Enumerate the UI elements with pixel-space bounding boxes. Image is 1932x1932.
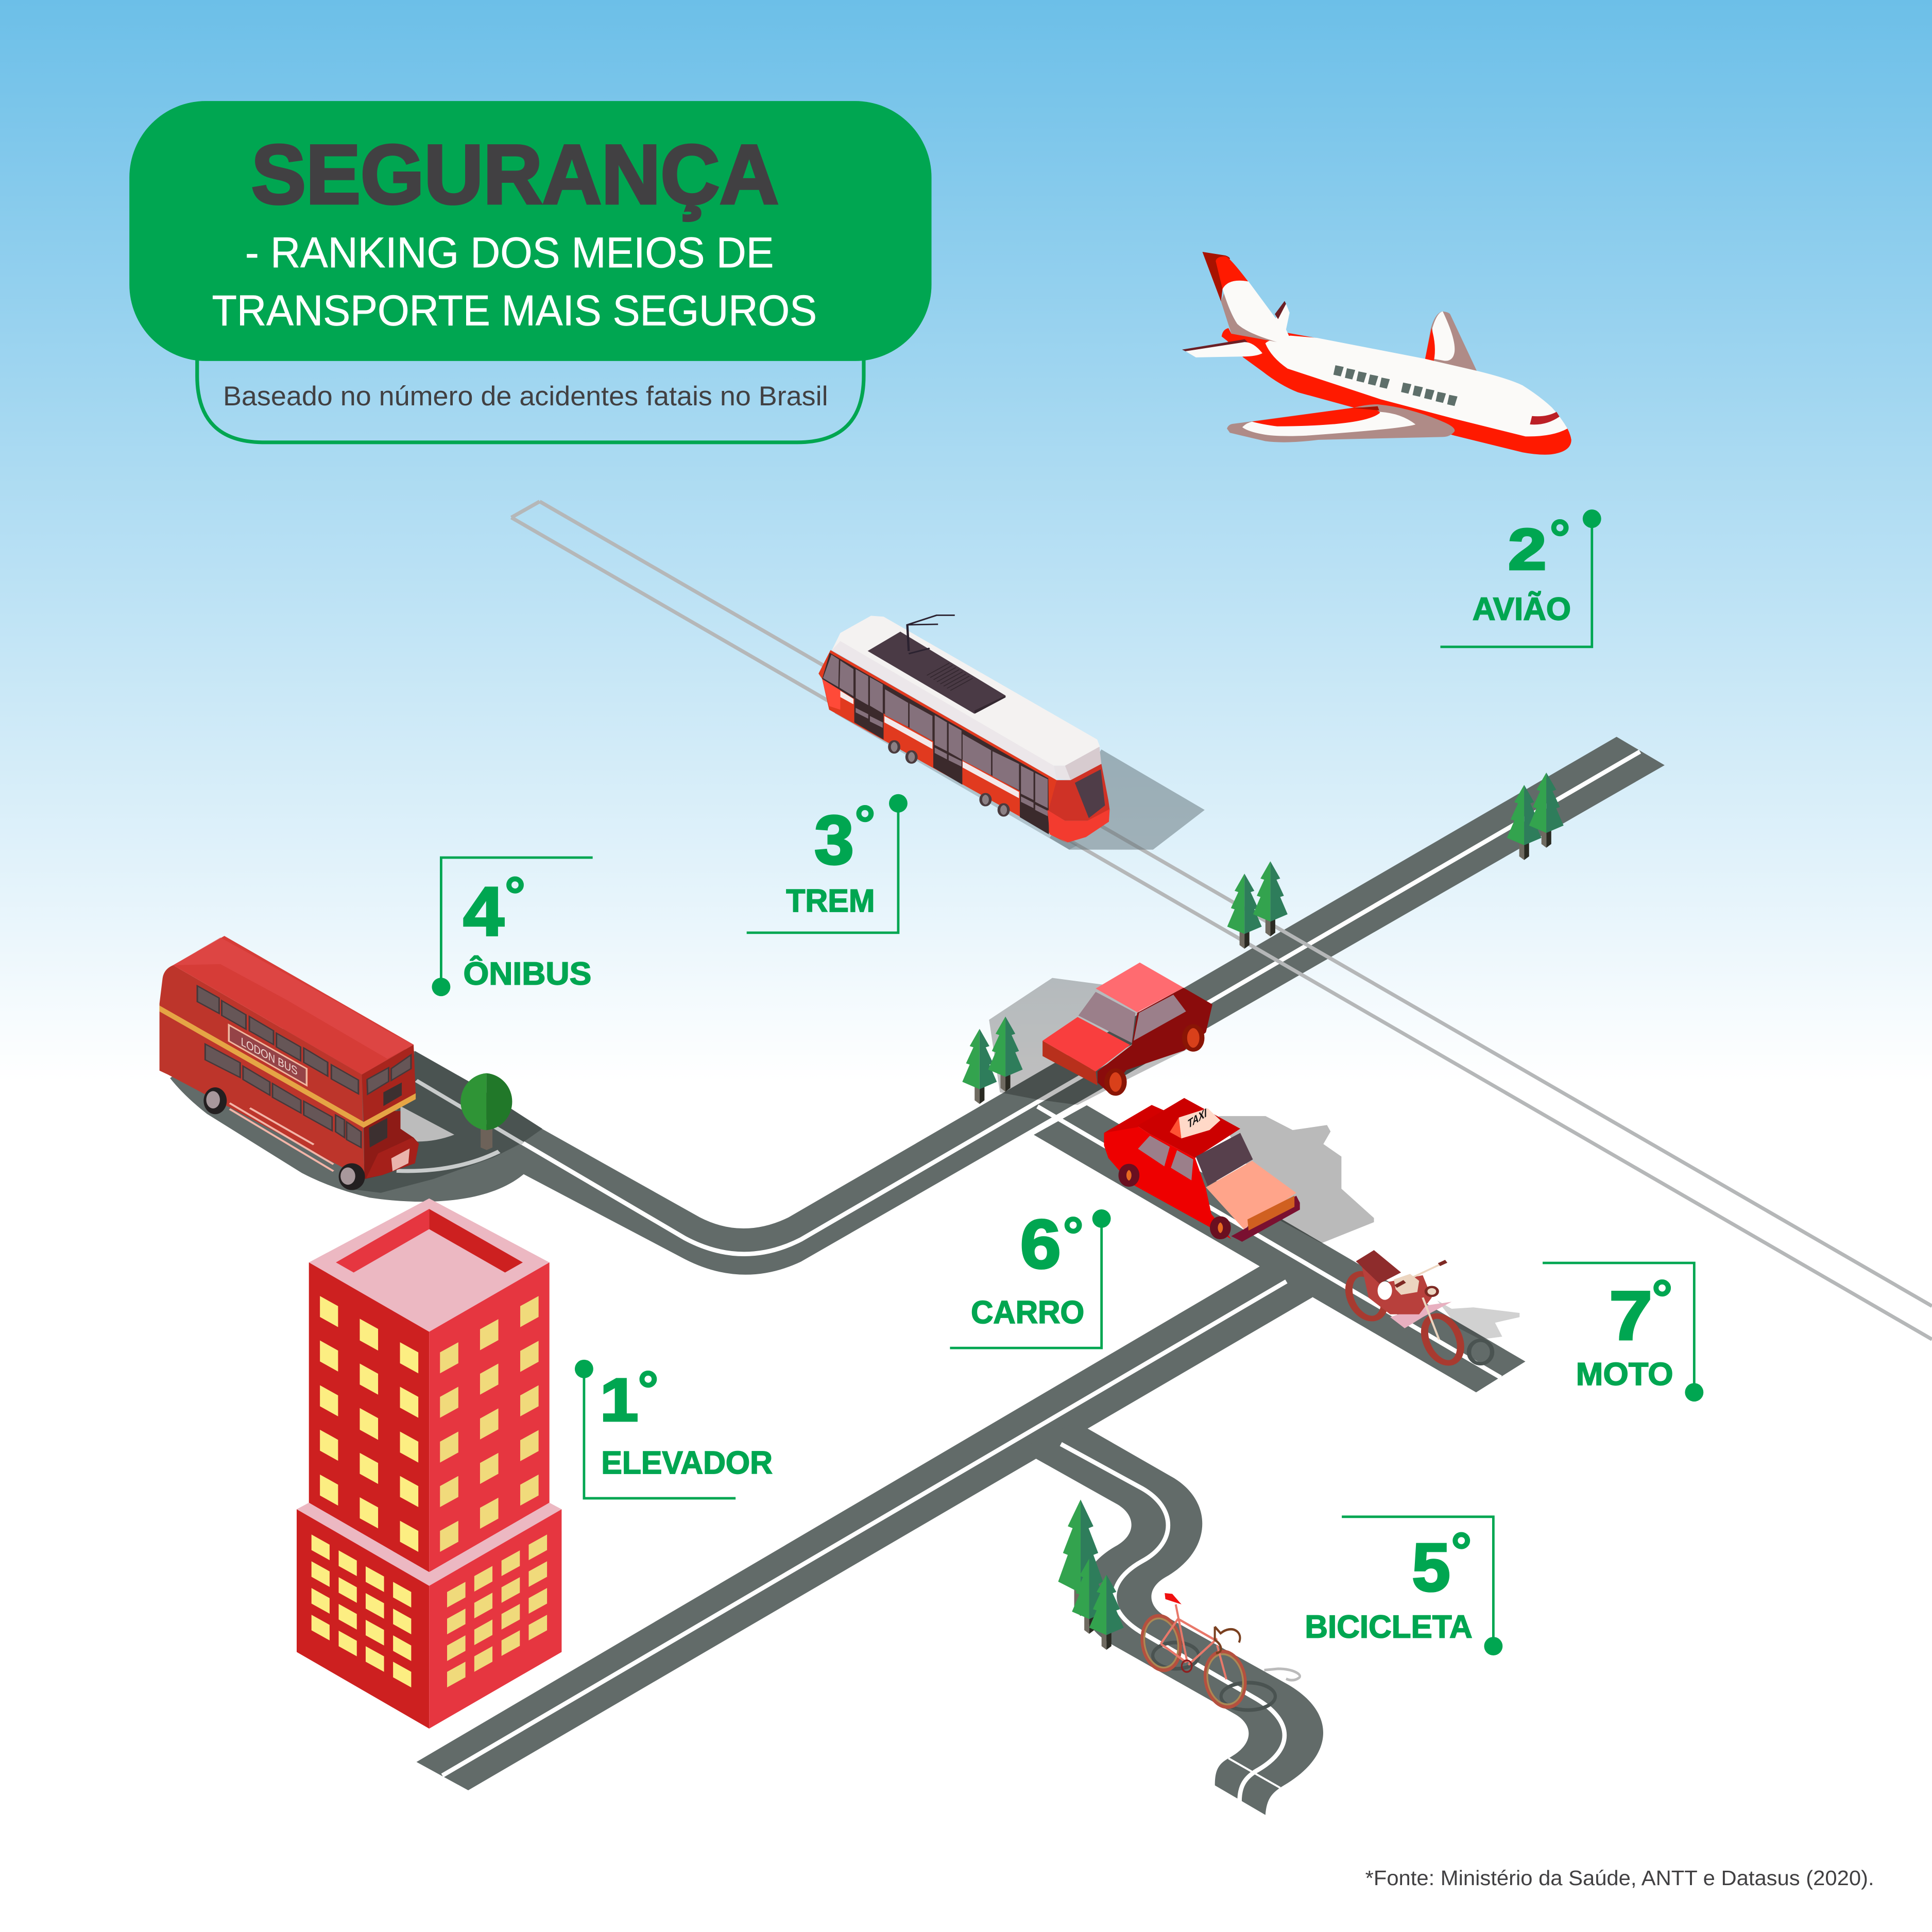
bus wheels (203, 1087, 365, 1190)
taxi roof (1137, 1098, 1240, 1158)
bus roof (173, 936, 414, 1074)
train roof panel (868, 631, 1005, 714)
label 5: bicicleta (1305, 1517, 1502, 1655)
taxi grille (1231, 1195, 1300, 1242)
motorcycle wheels (1343, 1271, 1467, 1366)
bus inner gap (401, 1106, 454, 1141)
lower left windows (312, 1534, 411, 1687)
label 3: trem: ° (854, 795, 875, 853)
label 5: bicicleta: ° (1451, 1522, 1472, 1580)
bus gold stripe (160, 1005, 416, 1128)
bus side (160, 965, 365, 1179)
main road with curve to the bus (170, 737, 1665, 1275)
train windows (822, 653, 1049, 834)
bus front small windows (369, 1083, 402, 1148)
bicycle shadow (1153, 1643, 1199, 1669)
title line one: - RANKING DOS MEIOS DE (245, 228, 774, 277)
taxi side (1104, 1126, 1231, 1239)
label 7: moto: MOTO (1576, 1357, 1673, 1392)
train pantograph (908, 615, 955, 654)
motorcycle frame (1390, 1302, 1451, 1328)
train rear and side (818, 650, 1068, 843)
bus hood and grille (366, 1138, 419, 1178)
near wing (1227, 404, 1455, 442)
car windows (1079, 992, 1186, 1043)
far wing (1425, 311, 1477, 371)
label 1: elevador: ° (638, 1361, 658, 1418)
bus destination sign: LODON BUS (241, 1035, 297, 1079)
trees beside the red car (962, 1017, 1023, 1104)
label 3: trem (747, 794, 908, 933)
title heading: SEGURANÇA (251, 128, 779, 221)
airplane red underside (1222, 328, 1571, 455)
motorcycle (1343, 1250, 1519, 1366)
taxi (1104, 1098, 1374, 1243)
label 4: ônibus: ÔNIBUS (463, 955, 591, 991)
bicycle handlebar (1215, 1627, 1240, 1653)
upper tower faces (309, 1262, 429, 1572)
lower right windows (447, 1534, 547, 1687)
car roof (1096, 963, 1184, 1012)
round tree (460, 1073, 512, 1150)
label 4: ônibus: ° (505, 867, 525, 925)
label 1: elevador (575, 1360, 773, 1498)
airplane white fuselage (1266, 336, 1567, 436)
taxi wheels (1122, 1167, 1227, 1236)
bicycle (1138, 1593, 1300, 1712)
label 7: moto: ° (1652, 1270, 1672, 1327)
double-decker bus (160, 936, 542, 1193)
subtitle: Baseado no número de acidentes fatais no Brasil (223, 381, 828, 412)
taxi sign (1170, 1105, 1220, 1138)
bus windows (197, 986, 411, 1148)
long diagonal road (417, 1244, 1331, 1790)
label 1: elevador: ELEVADOR (601, 1445, 773, 1481)
subtitle outline box (197, 345, 864, 442)
building ledge (297, 1503, 561, 1586)
passenger windows (1333, 365, 1458, 406)
label 4: ônibus: 4 (463, 874, 504, 950)
train roof (832, 616, 1100, 766)
upper left windows (320, 1296, 418, 1552)
lower block faces (297, 1509, 429, 1729)
bus destination sign (229, 1025, 306, 1085)
railway track (511, 502, 1932, 1339)
building roof (309, 1199, 550, 1332)
airplane (1182, 252, 1571, 455)
bus road shadow (349, 1051, 542, 1193)
car hood (1042, 1017, 1130, 1071)
rear stabilizer (1182, 339, 1262, 357)
taxi shadow (1219, 1116, 1374, 1243)
bus lower stripes (230, 1103, 333, 1171)
title line two: TRANSPORTE MAIS SEGUROS (212, 286, 817, 335)
upper right windows (440, 1296, 539, 1552)
road towards motorcycle (1034, 1105, 1526, 1392)
label 6: carro: 6 (1020, 1206, 1061, 1283)
road centre stripes (417, 751, 1640, 1801)
car side (1098, 988, 1212, 1092)
winding bicycle road (1023, 1411, 1323, 1815)
tail fin (1202, 252, 1291, 342)
train shadow (1050, 749, 1205, 850)
building: elevador (297, 1199, 561, 1729)
label 6: carro (950, 1206, 1111, 1348)
train front (1048, 764, 1110, 821)
taxi windows (1138, 1136, 1193, 1181)
bus turn stripe (397, 1152, 499, 1171)
train wheels (890, 741, 1008, 816)
taxi hood (1206, 1161, 1296, 1229)
bicycle trees (1058, 1499, 1124, 1650)
cockpit window (1530, 412, 1560, 424)
label 2: avião: 2 (1508, 517, 1546, 582)
road network (170, 737, 1665, 1815)
trees along main road (1227, 773, 1564, 949)
label 2: avião (1441, 509, 1601, 647)
red car (989, 963, 1212, 1105)
car wheels (1107, 1026, 1202, 1094)
label 7: moto: 7 (1609, 1277, 1652, 1354)
bicycle frame (1161, 1604, 1226, 1679)
label 5: bicicleta: BICICLETA (1305, 1609, 1473, 1645)
label 4: ônibus (432, 858, 593, 996)
label 5: bicicleta: 5 (1412, 1529, 1450, 1605)
label 6: carro: CARRO (971, 1295, 1084, 1330)
label 3: trem: 3 (814, 802, 854, 879)
label 3: trem: TREM (786, 883, 875, 919)
bus front (362, 1045, 416, 1127)
source footnote: *Fonte: Ministério da Saúde, ANTT e Datasus (2020). (1365, 1866, 1874, 1890)
shaded road stripe (416, 1081, 523, 1143)
label 2: avião: ° (1549, 509, 1570, 567)
car shadow (989, 978, 1188, 1105)
bicycle wheels (1138, 1612, 1250, 1712)
taxi sign: TAXI (1188, 1105, 1207, 1132)
car front (1042, 1041, 1098, 1085)
title panel (129, 101, 932, 361)
train white stripes (884, 716, 1019, 798)
train (818, 615, 1205, 850)
bicycle saddle (1165, 1593, 1182, 1604)
label 7: moto (1543, 1263, 1703, 1401)
motorcycle shadow (1437, 1301, 1519, 1340)
taxi trunk (1104, 1105, 1165, 1133)
label 1: elevador: 1 (600, 1366, 638, 1433)
label 2: avião: AVIÃO (1473, 590, 1571, 627)
label 6: carro: ° (1063, 1207, 1084, 1264)
